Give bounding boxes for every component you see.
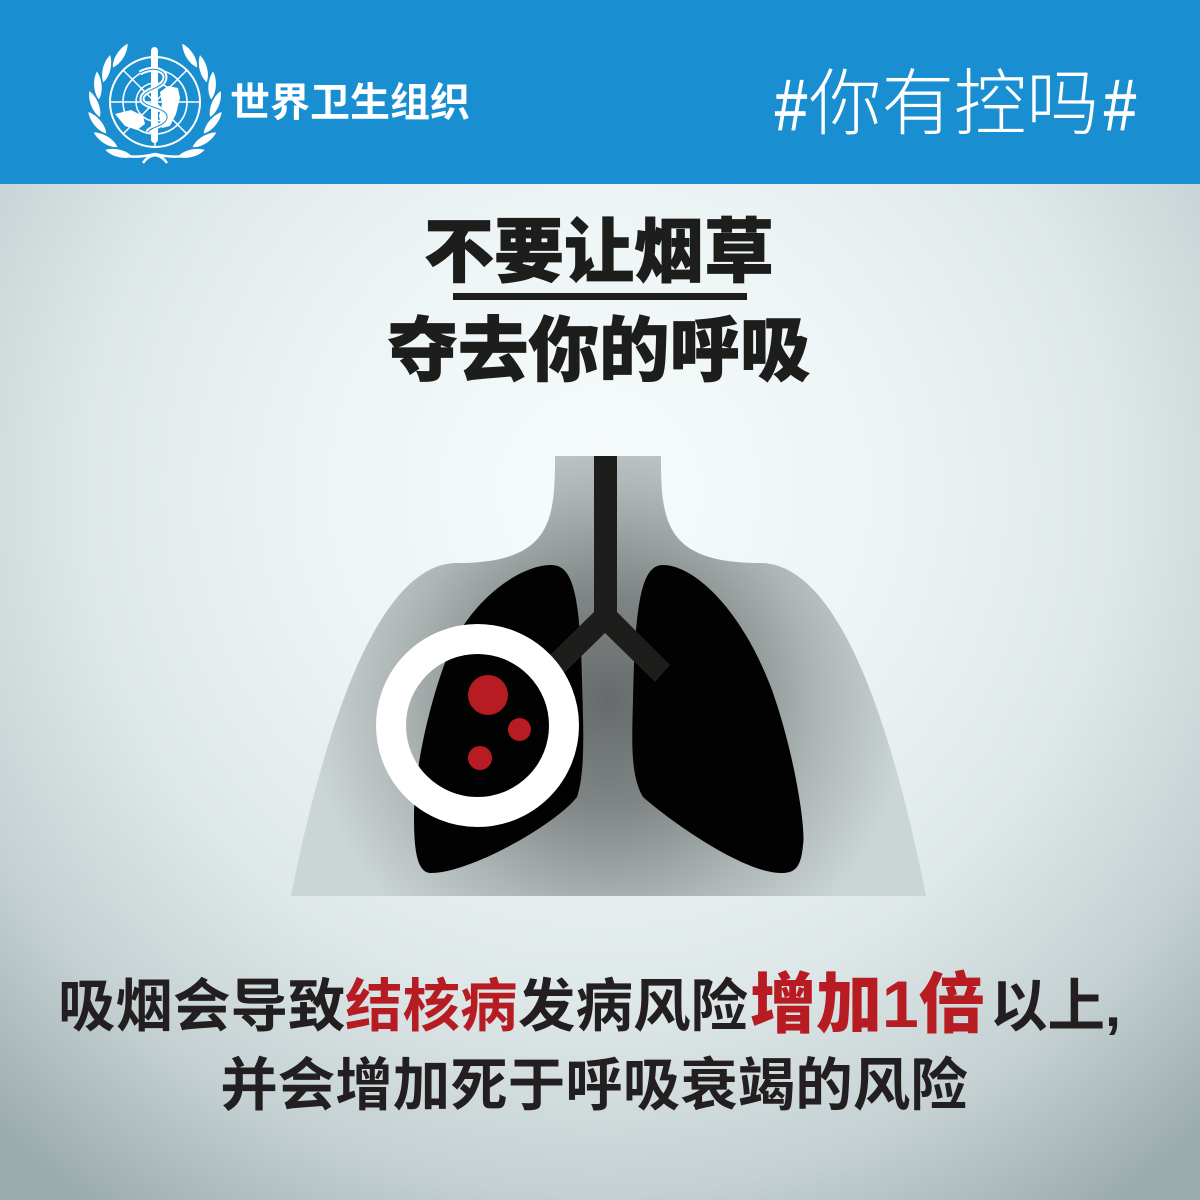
magnifier ring [391, 639, 564, 812]
title: 不要让烟草 [424, 213, 774, 291]
red lesions [468, 675, 531, 770]
caption line 1: 发病风险 [518, 975, 748, 1039]
hashtag: # [775, 65, 807, 145]
title: 夺去你的呼吸 [388, 311, 810, 390]
hashtag: 你有控吗 [809, 64, 1099, 145]
torso silhouette [291, 456, 926, 896]
organization name: 世界卫生组织 [230, 81, 470, 125]
caption line 1: 增加1倍 [750, 967, 985, 1041]
caption line 1: 吸烟会导致 [58, 975, 346, 1039]
header band [0, 0, 1200, 184]
caption line 1: 以上, [990, 975, 1121, 1039]
caption line 1: 结核病 [345, 975, 518, 1039]
right lung [632, 565, 803, 873]
caption [58, 967, 1121, 1118]
trachea and bronchi [540, 456, 670, 682]
icon: WHO emblem [85, 42, 225, 163]
lungs illustration [291, 456, 926, 896]
caption line 2: 并会增加死于呼吸衰竭的风险 [220, 1054, 968, 1118]
title [388, 213, 810, 390]
title underline [453, 293, 747, 300]
hashtag: # [1104, 65, 1136, 145]
left lung [414, 565, 583, 873]
